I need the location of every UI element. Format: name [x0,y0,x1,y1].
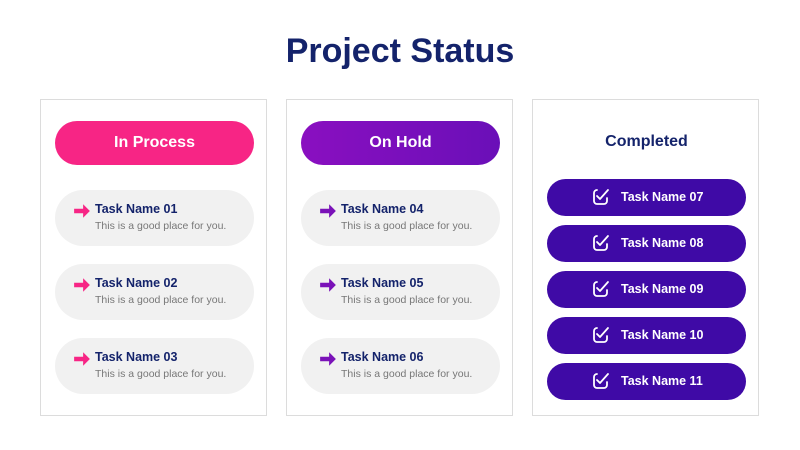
task 09: Task Name 09 [621,282,703,296]
task 03 [55,338,254,394]
task 10: Task Name 10 [621,328,703,342]
task 06: Task Name 06 [341,350,423,364]
task 04 [301,190,500,246]
task 07: Task Name 07 [621,190,703,204]
task 08 [547,225,746,262]
task 06: This is a good place for you. [341,368,472,380]
task 11: Task Name 11 [621,374,703,388]
task 02: Task Name 02 [95,276,177,290]
task 05: Task Name 05 [341,276,423,290]
panel: completed [532,99,759,416]
header: Completed: Completed [605,133,688,150]
task 05 [301,264,500,320]
panel: in process [40,99,267,416]
header: In Process: In Process [114,134,195,151]
task 09 [547,271,746,308]
task 01: This is a good place for you. [95,220,226,232]
task 02: This is a good place for you. [95,294,226,306]
task 08: Task Name 08 [621,236,703,250]
title: Project Status [286,32,514,70]
task 04: This is a good place for you. [341,220,472,232]
task 06 [301,338,500,394]
task 02 [55,264,254,320]
header: On Hold: On Hold [369,134,432,151]
task 01 [55,190,254,246]
header: In Process [55,121,254,165]
task 04: Task Name 04 [341,202,423,216]
header: On Hold [301,121,500,165]
task 11 [547,363,746,400]
task 01: Task Name 01 [95,202,177,216]
task 05: This is a good place for you. [341,294,472,306]
task 07 [547,179,746,216]
task 03: Task Name 03 [95,350,177,364]
panel: on hold [286,99,513,416]
task 03: This is a good place for you. [95,368,226,380]
task 10 [547,317,746,354]
